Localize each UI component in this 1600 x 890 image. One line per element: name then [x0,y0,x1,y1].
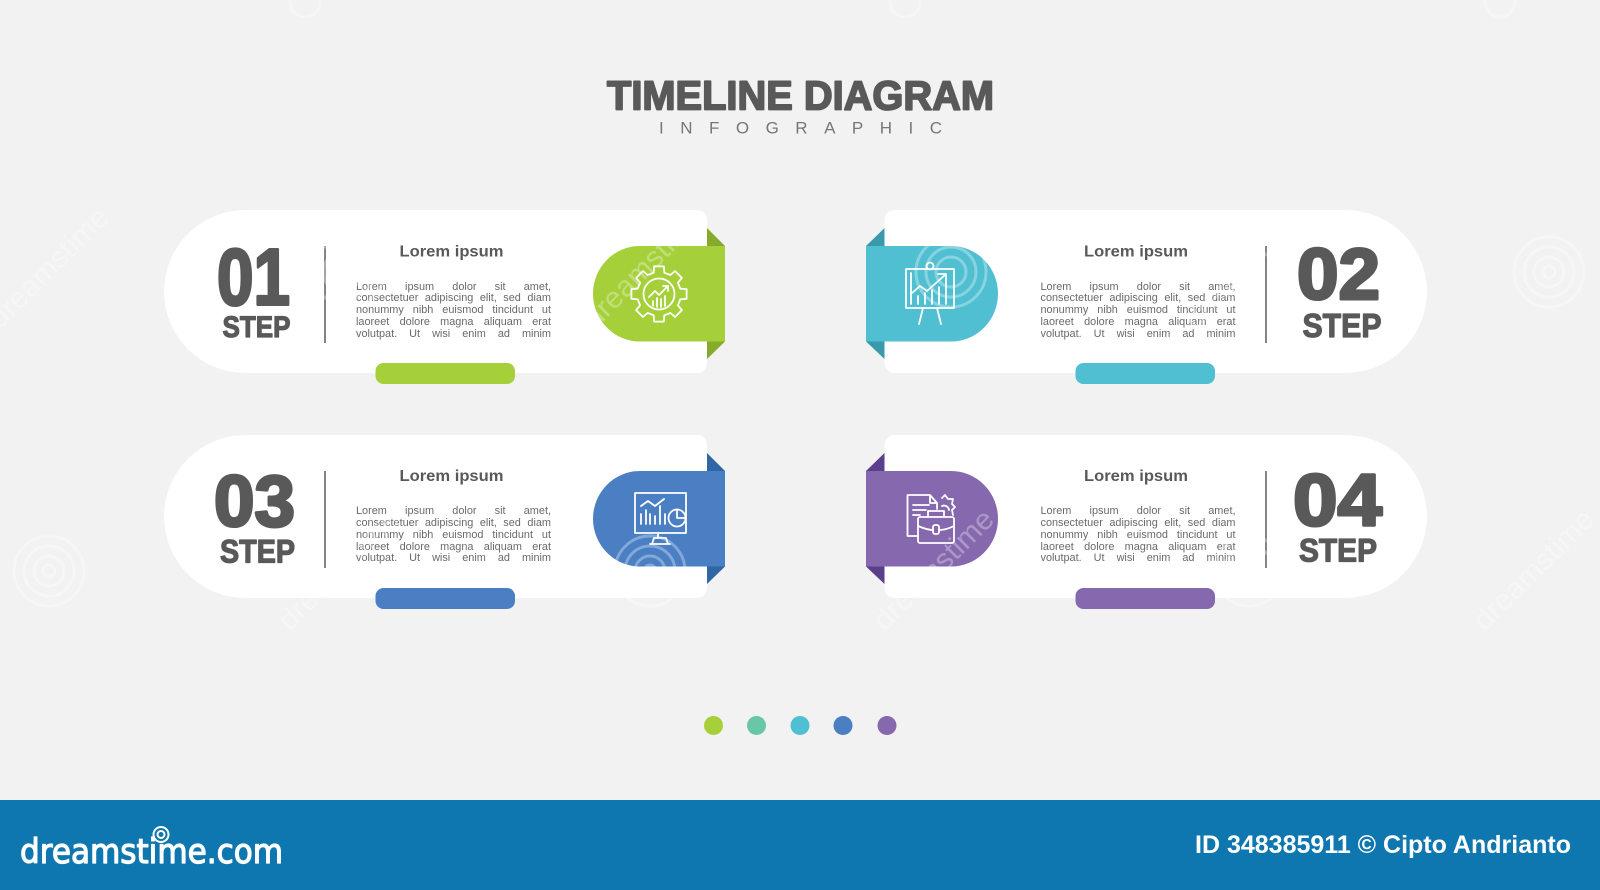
text block: laoreet dolore magna aliquam erat [1040,541,1236,553]
pagination dots [704,716,896,735]
panel: step 03 [164,435,725,609]
card background [164,210,707,373]
heading: Lorem ipsum [1084,244,1188,260]
text block: volutpat. Ut wisi enim ad minim [356,552,551,564]
accent bar [1076,363,1215,384]
icon: monitor with charts [635,493,686,544]
panel: step 02 [866,210,1427,384]
step number: 03 [214,462,295,542]
accent bar [376,588,515,609]
panel: step 01 [164,210,725,384]
step label: STEP [222,311,290,344]
divider [324,246,326,343]
text block: nonummy nibh euismod tincidunt ut [1040,529,1236,541]
watermark text: dreamstime [1467,503,1600,637]
text block: laoreet dolore magna aliquam erat [356,316,551,328]
watermark text: dreamstime [577,201,711,335]
accent bar [1076,588,1215,609]
divider [1265,471,1267,568]
ribbon folds [707,228,725,359]
divider [324,471,326,568]
ribbon folds [866,453,884,584]
text block [356,506,552,568]
accent bar [376,363,515,384]
heading: Lorem ipsum [400,468,504,485]
ribbon folds [707,453,725,584]
watermark spirals [14,0,1584,606]
heading: Lorem ipsum [1084,468,1188,485]
footer logo: dreamstime.com [20,832,283,872]
ribbon tab [593,246,725,342]
step label: STEP [220,534,295,570]
card background [884,210,1427,373]
text block [1040,506,1236,568]
icon: presentation board [906,262,954,324]
text block: consectetuer adipiscing elit, sed diam [1040,292,1236,304]
subtitle: INFOGRAPHIC [659,118,942,138]
title: TIMELINE DIAGRAM [607,72,994,118]
icon: logo spiral [154,827,168,842]
icon: briefcase with document [908,495,955,543]
text block [356,282,552,344]
step number: 02 [1297,235,1380,315]
ribbon tab [866,471,998,566]
watermark text: dreamstime [1177,201,1311,335]
watermark text: dreamstime [272,503,406,637]
text block [1040,282,1236,344]
panel: step 04 [866,435,1427,609]
text block: laoreet dolore magna aliquam erat [356,541,551,553]
watermark text: dreamstime [867,503,1001,637]
heading: Lorem ipsum [400,244,504,260]
title [607,72,994,138]
divider [1265,246,1267,343]
footer band [0,800,1600,890]
text block: nonummy nibh euismod tincidunt ut [356,304,551,316]
ribbon tab [593,471,725,566]
ribbon tab [866,246,998,342]
step number: 04 [1293,460,1382,542]
text block: laoreet dolore magna aliquam erat [1040,316,1236,328]
step label: STEP [1302,307,1382,344]
icon: gear with chart [631,266,687,322]
text block: volutpat. Ut wisi enim ad minim [1040,328,1236,340]
text block: volutpat. Ut wisi enim ad minim [356,328,551,340]
text block: consectetuer adipiscing elit, sed diam [356,517,551,529]
text block: consectetuer adipiscing elit, sed diam [356,292,551,304]
step label: STEP [1299,532,1377,568]
card background [164,435,707,598]
card background [884,435,1427,598]
text block: consectetuer adipiscing elit, sed diam [1040,517,1236,529]
text block: nonummy nibh euismod tincidunt ut [356,529,551,541]
text block: volutpat. Ut wisi enim ad minim [1040,552,1236,564]
image id and credit: ID 348385911 © Cipto Andrianto [1195,831,1571,859]
ribbon folds [866,228,884,359]
text block: nonummy nibh euismod tincidunt ut [1040,304,1236,316]
watermark text [0,201,1600,637]
step number: 01 [217,232,290,322]
